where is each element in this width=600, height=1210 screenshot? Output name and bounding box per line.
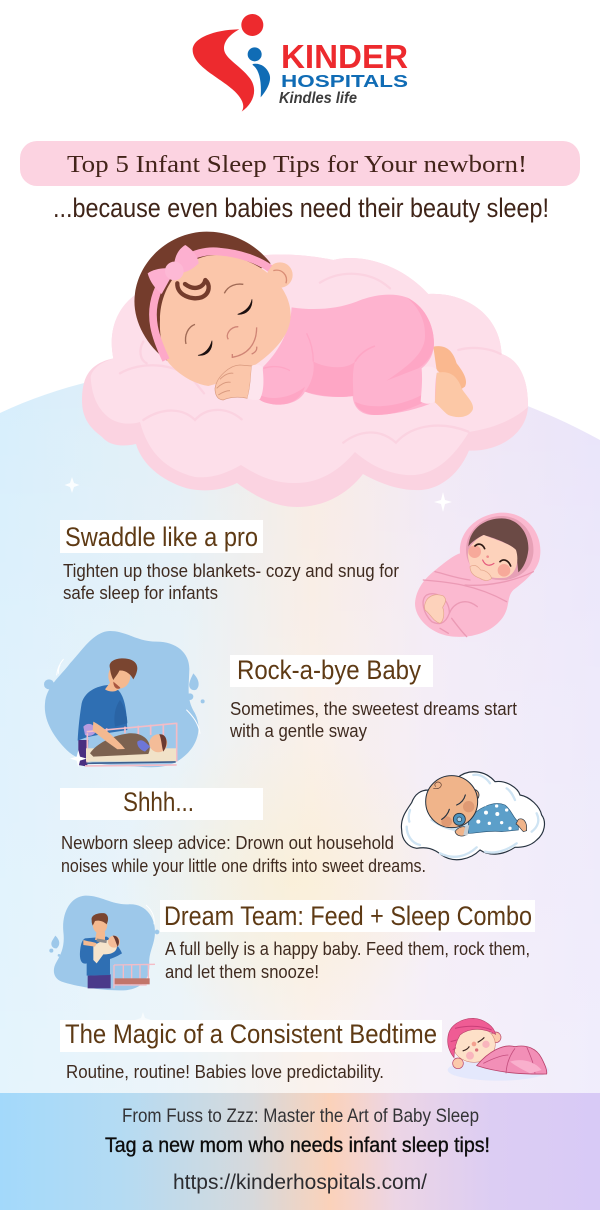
tip 2 description: with a gentle sway (229, 721, 367, 741)
foot, rear (433, 346, 466, 390)
tip 2 heading: Rock-a-bye Baby (237, 655, 421, 685)
footer url: https://kinderhospitals.com/ (173, 1171, 427, 1194)
hair (134, 232, 271, 362)
tip 5 description: Routine, routine! Babies love predictability. (66, 1062, 384, 1082)
icon: baby with pacifier on white cloud (401, 772, 544, 860)
tip 1 description (63, 561, 399, 603)
logo: Kindles life (279, 90, 357, 107)
footer band (0, 1093, 600, 1210)
tip 4 heading: Dream Team: Feed + Sleep Combo (164, 901, 532, 931)
logo mark (193, 14, 270, 112)
foot, front (434, 372, 473, 417)
tip 4: dream team (49, 896, 535, 990)
logo wordmark: KINDER (281, 38, 408, 75)
icon: baby in pink hat and blanket (448, 1018, 549, 1081)
footer call to action: Tag a new mom who needs infant sleep tips! (105, 1134, 490, 1157)
tip 3 heading (60, 787, 263, 820)
tip 4 description (165, 939, 530, 982)
tip 1 description: Tighten up those blankets- cozy and snug for (63, 561, 399, 581)
tip 1 description: safe sleep for infants (63, 583, 218, 603)
face (160, 255, 291, 386)
bow (148, 245, 199, 294)
title banner: Top 5 Infant Sleep Tips for Your newborn! (67, 152, 527, 178)
tip 3: shhh (60, 772, 544, 876)
tip 5 heading: The Magic of a Consistent Bedtime (65, 1019, 437, 1049)
tip 1: swaddle (60, 513, 540, 637)
sleeping eyes, brows, nose and smile (185, 284, 257, 358)
icon: father rocking baby in crib (44, 631, 205, 767)
tip 1 heading: Swaddle like a pro (65, 522, 258, 552)
tip 3 heading: Shhh... (123, 787, 194, 817)
hand (215, 365, 252, 400)
tip 2 description (229, 699, 517, 741)
headband (153, 251, 270, 360)
logo: HOSPITALS (281, 71, 408, 91)
tip 5: consistent bedtime (60, 1018, 549, 1082)
icon: swaddled baby (415, 513, 540, 637)
tip 2: rock-a-bye (44, 631, 517, 767)
footer tagline: From Fuss to Zzz: Master the Art of Baby Sleep (122, 1106, 479, 1127)
ear (267, 262, 293, 288)
logo (193, 14, 408, 112)
tip 3 description: noises while your little one drifts into sweet dreams. (61, 856, 426, 876)
illustration: baby sleeping on pink cloud (82, 232, 528, 507)
tip 4 description: A full belly is a happy baby. Feed them, rock them, (165, 939, 530, 959)
sleeper body (257, 295, 437, 415)
tip 2 description: Sometimes, the sweetest dreams start (230, 699, 517, 719)
cuffs (247, 365, 437, 404)
icon: father feeding baby (49, 896, 159, 990)
tip 3 description (61, 833, 426, 876)
title banner (20, 141, 580, 186)
sparkles (64, 477, 452, 1028)
hair curl (177, 280, 209, 298)
tip 4 description: and let them snooze! (165, 962, 319, 982)
cloud (82, 255, 528, 507)
tip 3 description: Newborn sleep advice: Drown out household (61, 833, 394, 853)
